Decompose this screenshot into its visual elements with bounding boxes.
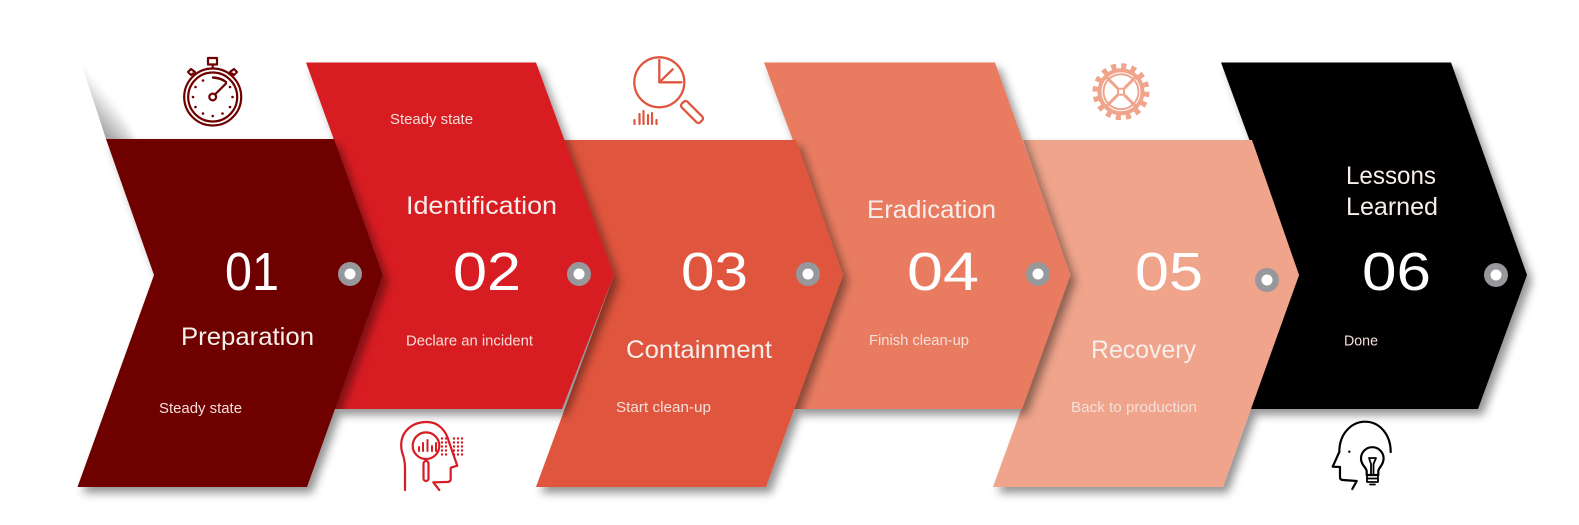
text: Done: Done bbox=[1344, 334, 1378, 350]
heading: Lessons Learned: Learned bbox=[1346, 193, 1438, 221]
heading: Lessons Learned: Lessons bbox=[1346, 162, 1436, 190]
panel: step 06 Lessons Learned bbox=[1221, 62, 1527, 409]
icon: stopwatch bbox=[184, 58, 241, 126]
number 02: 02 bbox=[453, 242, 521, 302]
number 06: 06 bbox=[1362, 242, 1431, 302]
heading: Preparation: Preparation bbox=[181, 323, 314, 351]
number 01: 01 bbox=[225, 242, 279, 302]
panel: step 02 Identification bbox=[306, 62, 614, 409]
text: Finish clean-up: Finish clean-up bbox=[869, 333, 969, 349]
icon: head with magnifier and data bbox=[401, 422, 466, 490]
icon: gear bbox=[1096, 67, 1146, 117]
text: Steady state: Steady state bbox=[390, 112, 473, 128]
number 03: 03 bbox=[681, 242, 748, 302]
heading: Recovery: Recovery bbox=[1091, 336, 1196, 364]
heading: Identification: Identification bbox=[406, 192, 557, 220]
icon: pie chart under magnifier bbox=[634, 57, 704, 124]
text: Start clean-up: Start clean-up bbox=[616, 400, 711, 416]
marker dot bbox=[796, 262, 820, 286]
marker dot bbox=[1484, 263, 1508, 287]
marker dot bbox=[567, 262, 591, 286]
panel: step 04 Eradication bbox=[764, 62, 1070, 409]
panel: step 03 Containment bbox=[536, 140, 843, 487]
panel: step 01 Preparation bbox=[78, 139, 383, 487]
marker dot bbox=[338, 262, 362, 286]
shadow wedge above step 01 bbox=[84, 71, 136, 139]
marker dot bbox=[1026, 262, 1050, 286]
infographic: six-step chevron process bbox=[78, 56, 1537, 499]
number 04: 04 bbox=[907, 242, 979, 302]
icon: head with light bulb bbox=[1333, 422, 1391, 489]
panel: step 05 Recovery bbox=[993, 140, 1299, 487]
text: Steady state: Steady state bbox=[159, 401, 242, 417]
heading: Containment: Containment bbox=[626, 336, 772, 364]
marker dot bbox=[1255, 268, 1279, 292]
text: Back to production: Back to production bbox=[1071, 400, 1197, 416]
heading: Eradication: Eradication bbox=[867, 196, 996, 224]
heading: Lessons Learned bbox=[1346, 162, 1438, 221]
number 05: 05 bbox=[1135, 242, 1203, 302]
text: Declare an incident: Declare an incident bbox=[406, 334, 533, 350]
